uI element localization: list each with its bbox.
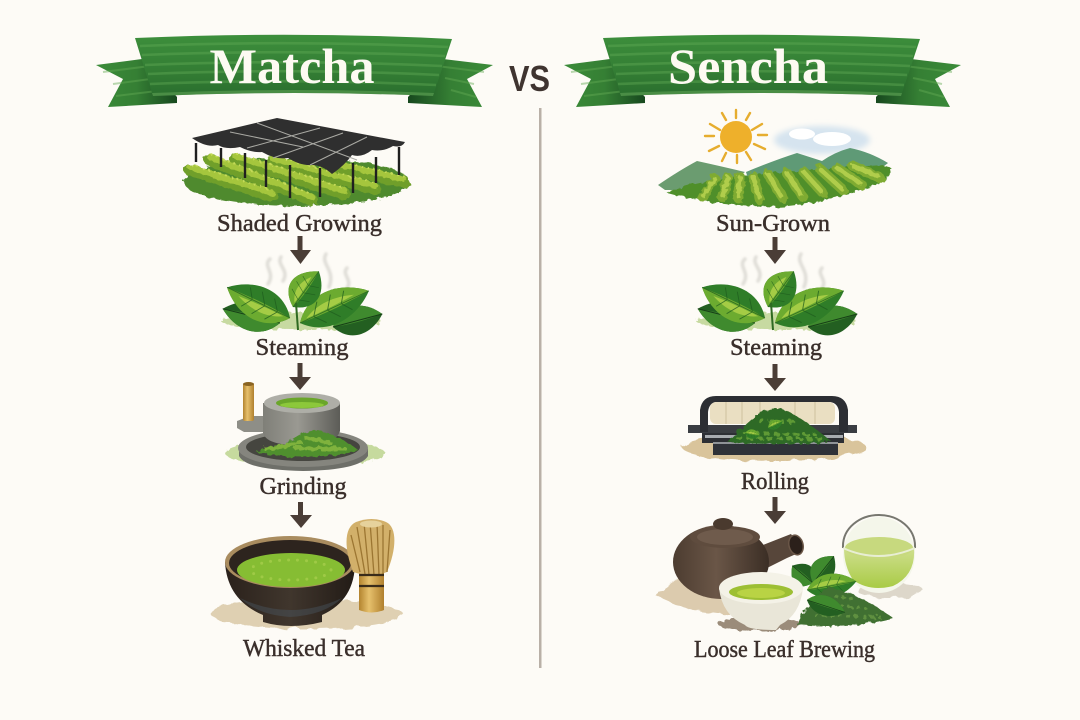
VS label: VS bbox=[509, 58, 550, 99]
arrow: to steaming bbox=[764, 237, 786, 264]
label: Steaming: Steaming bbox=[730, 335, 822, 361]
label: Whisked Tea: Whisked Tea bbox=[243, 636, 365, 662]
icon: rolling machine bbox=[682, 396, 866, 461]
banner: Matcha bbox=[96, 35, 493, 107]
label: Rolling: Rolling bbox=[741, 469, 809, 495]
icon: matcha bowl and whisk bbox=[211, 519, 403, 629]
banner: Sencha bbox=[564, 35, 961, 107]
center divider bbox=[539, 108, 542, 668]
icon: shaded tea field bbox=[184, 118, 410, 206]
label: Loose Leaf Brewing: Loose Leaf Brewing bbox=[694, 637, 875, 663]
label: Sun-Grown: Sun-Grown bbox=[716, 211, 830, 237]
icon: teapot, cup and loose leaf bbox=[655, 515, 923, 631]
arrow: to rolling bbox=[764, 364, 786, 391]
icon: sunny tea field bbox=[658, 110, 893, 207]
arrow: to whisked tea bbox=[290, 502, 312, 528]
arrow: to grinding bbox=[289, 363, 311, 390]
label: Steaming: Steaming bbox=[256, 335, 348, 361]
arrow: to brewing bbox=[764, 497, 786, 524]
panel: Matcha column bbox=[96, 35, 493, 662]
banner: Sencha: Sencha bbox=[668, 38, 828, 94]
icon: steaming leaves bbox=[694, 254, 861, 341]
icon: stone mill bbox=[225, 382, 385, 471]
icon: steaming leaves bbox=[219, 254, 386, 341]
label: Grinding: Grinding bbox=[260, 474, 346, 500]
banner: Matcha: Matcha bbox=[210, 38, 374, 94]
panel: Sencha column bbox=[564, 35, 961, 663]
arrow: to steaming bbox=[290, 236, 311, 264]
label: Shaded Growing: Shaded Growing bbox=[217, 211, 382, 237]
